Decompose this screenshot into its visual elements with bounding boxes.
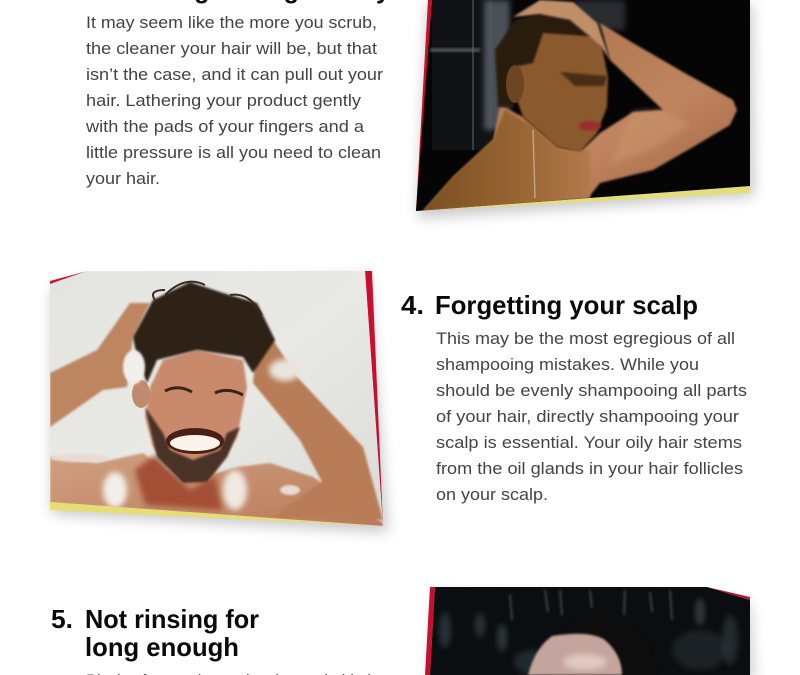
photo: smiling man lathering hair	[50, 271, 388, 532]
photo: man rinsing hair under shower	[410, 0, 755, 218]
heading: not rinsing for long enough	[51, 604, 259, 662]
section 5: not rinsing for long enough	[51, 604, 371, 675]
body text: scalp advice: should be evenly shampooing all parts	[436, 381, 747, 400]
body text: scalp advice: on your scalp.	[436, 485, 548, 504]
body text: scalp advice: from the oil glands in your hair follicles	[436, 459, 743, 478]
heading: forgetting your scalp: Forgetting your scalp	[435, 290, 698, 320]
body text: scrubbing advice: It may seem like the more you scrub,	[86, 13, 377, 32]
photo: man with wet hair in rain	[425, 585, 755, 675]
body text: scalp advice: scalp is essential. Your oily hair stems	[436, 433, 742, 452]
body text: scalp advice: of your hair, directly shampooing your	[436, 407, 739, 426]
heading: not rinsing for long enough: Not rinsing for	[85, 604, 259, 634]
body text: scrubbing advice: your hair.	[86, 169, 160, 188]
body text: scrubbing advice: the cleaner your hair will be, but that	[86, 39, 377, 58]
body text: scrubbing advice	[85, 13, 383, 188]
heading: not rinsing for long enough: 5.	[51, 604, 73, 634]
body text: scrubbing advice: isn’t the case, and it can pull out your	[86, 65, 383, 84]
body text: scrubbing advice: little pressure is all you need to clean	[86, 143, 381, 162]
body text: scalp advice: This may be the most egregious of all	[436, 329, 735, 348]
body text: scalp advice	[436, 329, 747, 504]
body text: scrubbing advice: with the pads of your fingers and a	[85, 117, 365, 136]
section 3: scrubbing too vigorously	[85, 0, 391, 188]
body text: scalp advice: shampooing mistakes. While you	[436, 355, 699, 374]
body text: scrubbing advice: hair. Lathering your product gently	[86, 91, 362, 110]
heading: forgetting your scalp: 4.	[401, 290, 424, 320]
section 4: forgetting your scalp	[401, 290, 747, 504]
heading: not rinsing for long enough: long enough	[85, 632, 239, 662]
